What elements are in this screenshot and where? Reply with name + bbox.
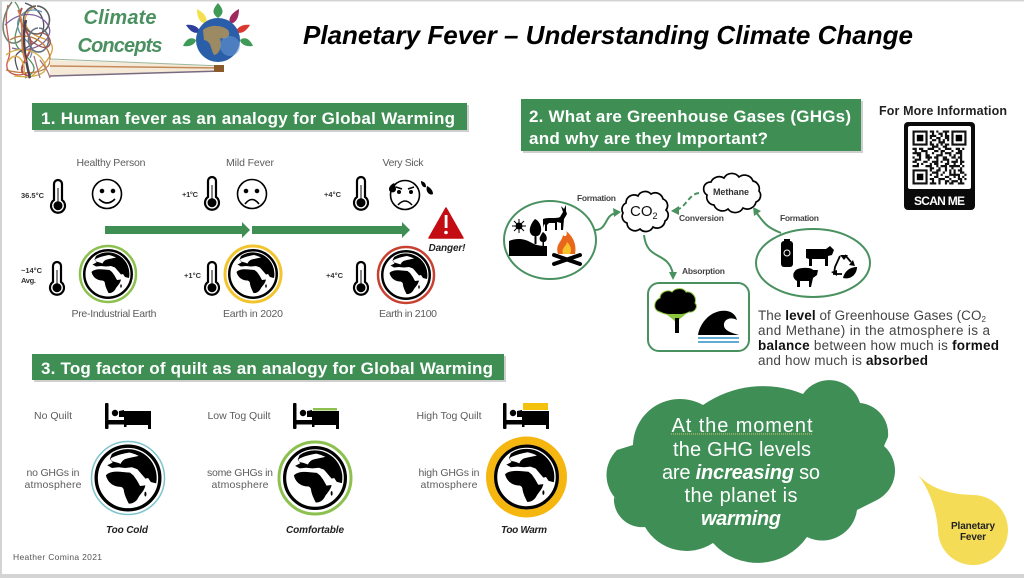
teardrop: planetary fever — [918, 475, 1008, 565]
label: average: Avg. — [21, 276, 36, 285]
label: formation: Formation — [780, 213, 819, 223]
arrow: formation to CO2 — [595, 208, 621, 230]
cloud: CO2: 2 — [652, 211, 658, 221]
icon: hills — [509, 239, 547, 256]
text block: balance explanation: The level of Greenhouse Gases (CO — [758, 308, 981, 323]
earth: pre-industrial — [80, 246, 136, 302]
heading 1 — [32, 103, 469, 132]
icon: bed low tog quilt — [293, 403, 339, 429]
text block: balance explanation: 2 — [982, 315, 987, 324]
label: some GHGs: some GHGs in — [207, 467, 273, 479]
arrow: progression 2 — [252, 222, 410, 238]
label: mild fever: Mild Fever — [226, 157, 274, 169]
panel: greenhouse gas cycle — [504, 173, 870, 351]
earth: 2020 — [225, 246, 281, 302]
heading 2 — [521, 99, 863, 153]
icon: recycle leaf — [831, 255, 857, 278]
earth: too warm — [490, 440, 563, 514]
icon: bed high tog quilt — [503, 403, 549, 429]
earth: 2100 — [378, 247, 434, 303]
heading 2: and why are they Important? — [529, 129, 768, 148]
cloud: methane — [704, 173, 761, 213]
callout text: the GHG levels — [673, 439, 811, 461]
text block: balance explanation: and Methane) in the atmosphere is a — [758, 323, 990, 338]
QR modules — [912, 130, 966, 184]
label: atmosphere: atmosphere — [24, 479, 82, 491]
earth: comfortable — [279, 442, 351, 514]
credit: Heather Comina 2021 — [13, 552, 102, 562]
cloud: CO2: CO — [630, 203, 652, 220]
logo petals — [183, 3, 253, 46]
temperature +4: +4°C — [326, 271, 344, 280]
label: atmosphere: atmosphere — [212, 479, 269, 491]
label: too warm: Too Warm — [501, 525, 547, 536]
icon: gas bottle — [781, 239, 793, 267]
label: absorption: Absorption — [682, 266, 725, 276]
heading 3 — [32, 354, 506, 382]
icon: sheep — [793, 268, 818, 287]
text block: balance explanation: and how much is absorbed — [758, 353, 928, 368]
label: very sick: Very Sick — [382, 157, 424, 169]
icon: sad face — [238, 180, 266, 208]
logo text: Climate — [84, 7, 156, 29]
teardrop: planetary fever: Fever — [960, 532, 986, 543]
arrow: CO2 to absorption — [644, 235, 677, 280]
logo threads — [3, 2, 52, 78]
label: no quilt: No Quilt — [34, 410, 72, 422]
logo: Climate Concepts: Concepts — [78, 35, 162, 57]
label: healthy person: Healthy Person — [76, 157, 146, 169]
thermometer — [354, 262, 368, 295]
title: Planetary Fever – Understanding Climate Change — [303, 20, 913, 50]
icon: smiley face — [92, 180, 122, 208]
heading 1: 1. Human fever as an analogy for Global Warming — [41, 109, 455, 128]
heading 2: 2. What are Greenhouse Gases (GHGs) — [529, 107, 851, 126]
callout text: are increasing so — [662, 462, 820, 484]
sources ellipse 2 — [756, 229, 870, 297]
icon: campfire — [554, 231, 580, 264]
absorption box — [648, 283, 749, 351]
label: high tog quilt: High Tog Quilt — [416, 410, 482, 422]
thermometer — [205, 262, 219, 295]
logo band — [50, 60, 222, 76]
thermometer — [51, 180, 65, 213]
arrow: methane to CO2 — [671, 193, 699, 215]
label: too cold: Too Cold — [106, 525, 149, 536]
icon: very sick face — [389, 180, 433, 210]
label: earth in 2100: Earth in 2100 — [379, 308, 437, 320]
arrow: sources to methane — [753, 207, 781, 233]
callout text: At the moment — [672, 415, 813, 437]
label: pre-industrial earth: Pre-Industrial Earth — [72, 308, 157, 320]
icon: tree — [655, 289, 696, 333]
label: high GHGs: high GHGs in — [418, 467, 480, 479]
panel: tog factor analogy — [24, 403, 563, 536]
label: low tog quilt: Low Tog Quilt — [208, 410, 271, 422]
thermometer — [354, 177, 368, 210]
callout cloud — [606, 380, 895, 563]
temperature +4: +4°C — [324, 190, 342, 199]
icon: danger triangle — [429, 208, 463, 238]
icon: trees — [530, 219, 547, 248]
cloud: CO2 — [622, 192, 668, 231]
teardrop: planetary fever: Planetary — [951, 521, 995, 532]
QR code: SCAN ME — [914, 194, 965, 208]
callout text — [662, 415, 820, 530]
cloud: methane: Methane — [713, 187, 749, 197]
label: comfortable: Comfortable — [286, 525, 344, 536]
QR code — [904, 122, 975, 210]
text block: balance explanation: balance between how much is formed — [758, 338, 999, 353]
icon: wave — [698, 311, 739, 342]
icon: cow — [806, 246, 834, 266]
arrow: progression 1 — [105, 222, 250, 238]
earth: too cold — [92, 442, 164, 514]
callout text: the planet is — [684, 485, 798, 507]
logo globe — [196, 18, 240, 62]
logo: Climate Concepts — [3, 2, 253, 78]
icon: deer — [543, 205, 567, 231]
panel: human fever analogy — [21, 157, 466, 320]
temperature +1: +1°C — [182, 190, 199, 199]
cloud shape — [606, 380, 895, 563]
label: conversion: Conversion — [679, 213, 724, 223]
thermometer — [50, 262, 64, 295]
text block: balance explanation — [758, 308, 999, 368]
heading 3: 3. Tog factor of quilt as an analogy for Global Warming — [41, 359, 493, 378]
thermometer — [205, 177, 219, 210]
temperature ~14: ~14°C — [21, 266, 43, 275]
label: danger: Danger! — [428, 243, 466, 254]
temperature +1: +1°C — [184, 271, 202, 280]
label: no GHGs: no GHGs in — [26, 467, 80, 479]
label: earth in 2020: Earth in 2020 — [223, 308, 283, 320]
label: for more information: For More Information — [879, 104, 1007, 118]
icon: bed no quilt — [105, 403, 151, 429]
callout text: warming — [701, 508, 781, 530]
icon: sun — [512, 219, 526, 233]
temperature 36.5: 36.5°C — [21, 191, 45, 200]
label: formation: Formation — [577, 193, 616, 203]
sources ellipse — [504, 201, 596, 279]
label: atmosphere: atmosphere — [420, 479, 478, 491]
